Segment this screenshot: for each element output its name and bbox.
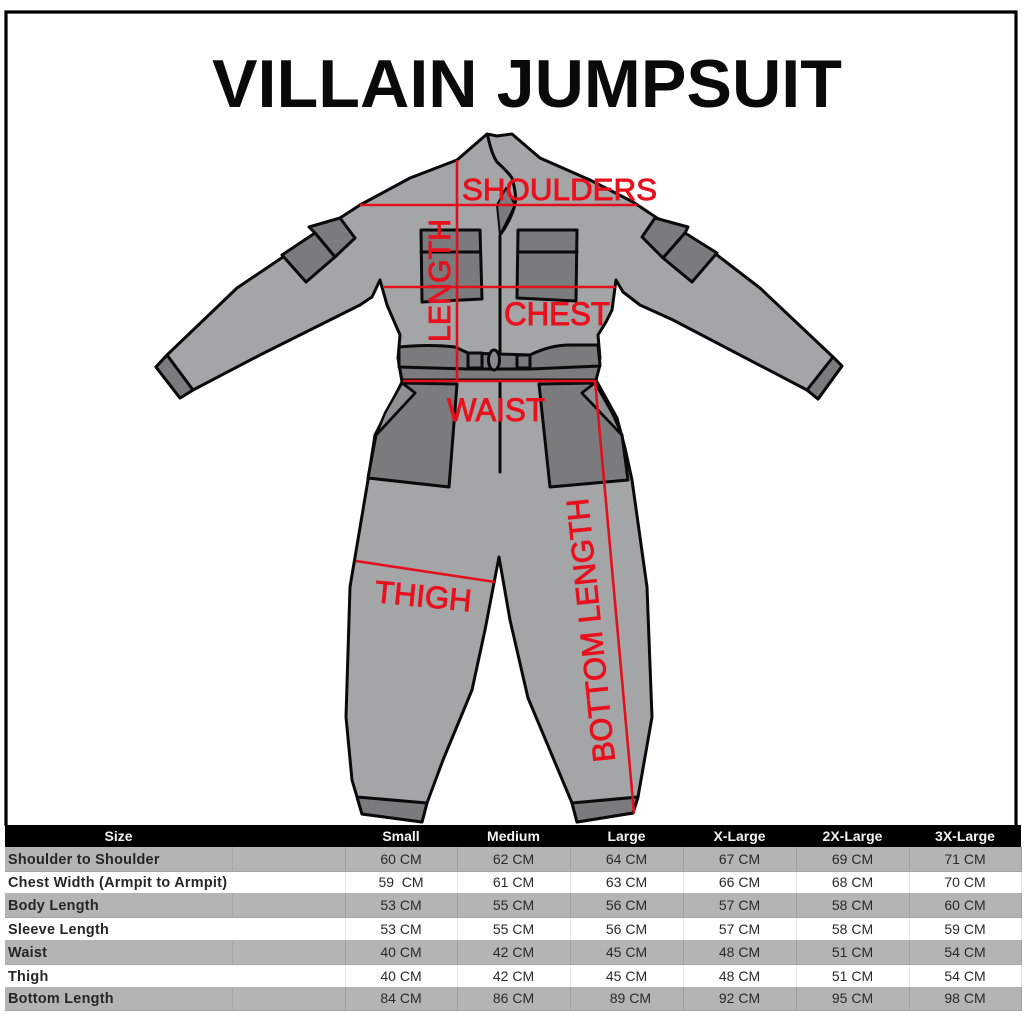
row: shoulder to shoulder: 71 CM (944, 851, 986, 867)
row: shoulder to shoulder: 69 CM (832, 851, 873, 867)
size chart table (5, 825, 1022, 1011)
row: waist: 40 CM (380, 944, 422, 960)
row: body length: Body Length (8, 898, 99, 914)
left leg cuff (357, 797, 427, 822)
row: chest width: 59 CM (378, 874, 424, 890)
jumpsuit garment (156, 134, 842, 822)
row: body length: 53 CM (380, 897, 422, 913)
row: waist: 54 CM (944, 944, 986, 960)
right hip pocket (539, 383, 628, 487)
row: sleeve length: 59 CM (944, 921, 986, 937)
row: thigh: 48 CM (719, 968, 760, 984)
row: thigh (8, 968, 986, 985)
row: thigh: 42 CM (493, 968, 534, 984)
row: thigh: 40 CM (380, 968, 422, 984)
row: bottom length: 95 CM (832, 990, 873, 1006)
row: waist: 51 CM (832, 944, 873, 960)
row: bottom length (5, 987, 1021, 1010)
table header row: Medium (487, 828, 540, 844)
row: chest width: 61 CM (493, 874, 534, 890)
row: sleeve length: 57 CM (719, 921, 760, 937)
row: chest width: Chest Width (Armpit to Armpit) (8, 875, 227, 891)
row: bottom length: 98 CM (944, 990, 986, 1006)
right shoulder patch (642, 218, 717, 282)
right leg cuff (572, 797, 638, 822)
left chest pocket (421, 230, 482, 302)
row: bottom length: 84 CM (380, 990, 422, 1006)
row: sleeve length: Sleeve Length (8, 922, 109, 938)
row: shoulder to shoulder: 60 CM (380, 851, 422, 867)
row: bottom length: 86 CM (493, 990, 534, 1006)
row: chest width: 63 CM (606, 874, 647, 890)
row: thigh: 54 CM (944, 968, 986, 984)
row: sleeve length: 58 CM (832, 921, 873, 937)
row: shoulder to shoulder: 64 CM (606, 851, 647, 867)
row: shoulder to shoulder (5, 847, 1021, 871)
row: chest width: 70 CM (944, 874, 986, 890)
measurement labels (373, 172, 657, 764)
row: body length: 60 CM (944, 897, 986, 913)
row: sleeve length: 53 CM (380, 921, 422, 937)
left sleeve cuff (156, 355, 193, 398)
row: waist: 45 CM (606, 944, 647, 960)
row: chest width: 68 CM (832, 874, 873, 890)
row: waist: 48 CM (719, 944, 760, 960)
label: length: LENGTH (422, 219, 457, 342)
left shoulder patch (282, 218, 355, 282)
row: waist (5, 940, 1021, 964)
row: body length: 57 CM (719, 897, 760, 913)
row: bottom length: 92 CM (719, 990, 760, 1006)
table header row: Large (607, 828, 646, 844)
table header row: X-Large (713, 828, 766, 844)
right sleeve cuff (807, 357, 842, 399)
table header row: 2X-Large (823, 828, 882, 844)
table header row (5, 825, 1021, 1010)
row: sleeve length: 56 CM (606, 921, 647, 937)
frame border (6, 12, 1016, 826)
row: body length: 58 CM (832, 897, 873, 913)
row: thigh: Thigh (8, 969, 49, 985)
collar and zip placket (488, 137, 516, 472)
row: shoulder to shoulder: 67 CM (719, 851, 760, 867)
row: waist: 42 CM (493, 944, 534, 960)
left hip pocket (368, 383, 457, 487)
row: chest width: 66 CM (719, 874, 760, 890)
row: chest width (8, 874, 986, 891)
measurement lines (356, 160, 637, 813)
label: bottom length: BOTTOM LENGTH (560, 497, 622, 764)
table header row: 3X-Large (935, 828, 995, 844)
row: waist: Waist (8, 945, 47, 961)
row: thigh: 51 CM (832, 968, 873, 984)
row: body length (5, 893, 1021, 917)
label: thigh: THIGH (373, 574, 473, 618)
table header row: Size (104, 828, 132, 844)
table header row: Small (382, 828, 420, 844)
label: chest: CHEST (504, 296, 610, 332)
row: bottom length: 89 CM (610, 990, 651, 1006)
row: sleeve length (8, 921, 986, 938)
row: shoulder to shoulder: Shoulder to Shoulder (8, 852, 160, 868)
row: shoulder to shoulder: 62 CM (493, 851, 534, 867)
row: thigh: 45 CM (606, 968, 647, 984)
right chest pocket (517, 230, 577, 301)
label: waist: WAIST (447, 392, 545, 428)
jumpsuit body outline (156, 134, 842, 822)
title: VILLAIN JUMPSUIT (212, 46, 842, 122)
row: sleeve length: 55 CM (493, 921, 534, 937)
row: body length: 56 CM (606, 897, 647, 913)
row: bottom length: Bottom Length (8, 991, 114, 1007)
label: shoulders: SHOULDERS (462, 172, 657, 207)
belt (399, 345, 600, 380)
row: body length: 55 CM (493, 897, 534, 913)
